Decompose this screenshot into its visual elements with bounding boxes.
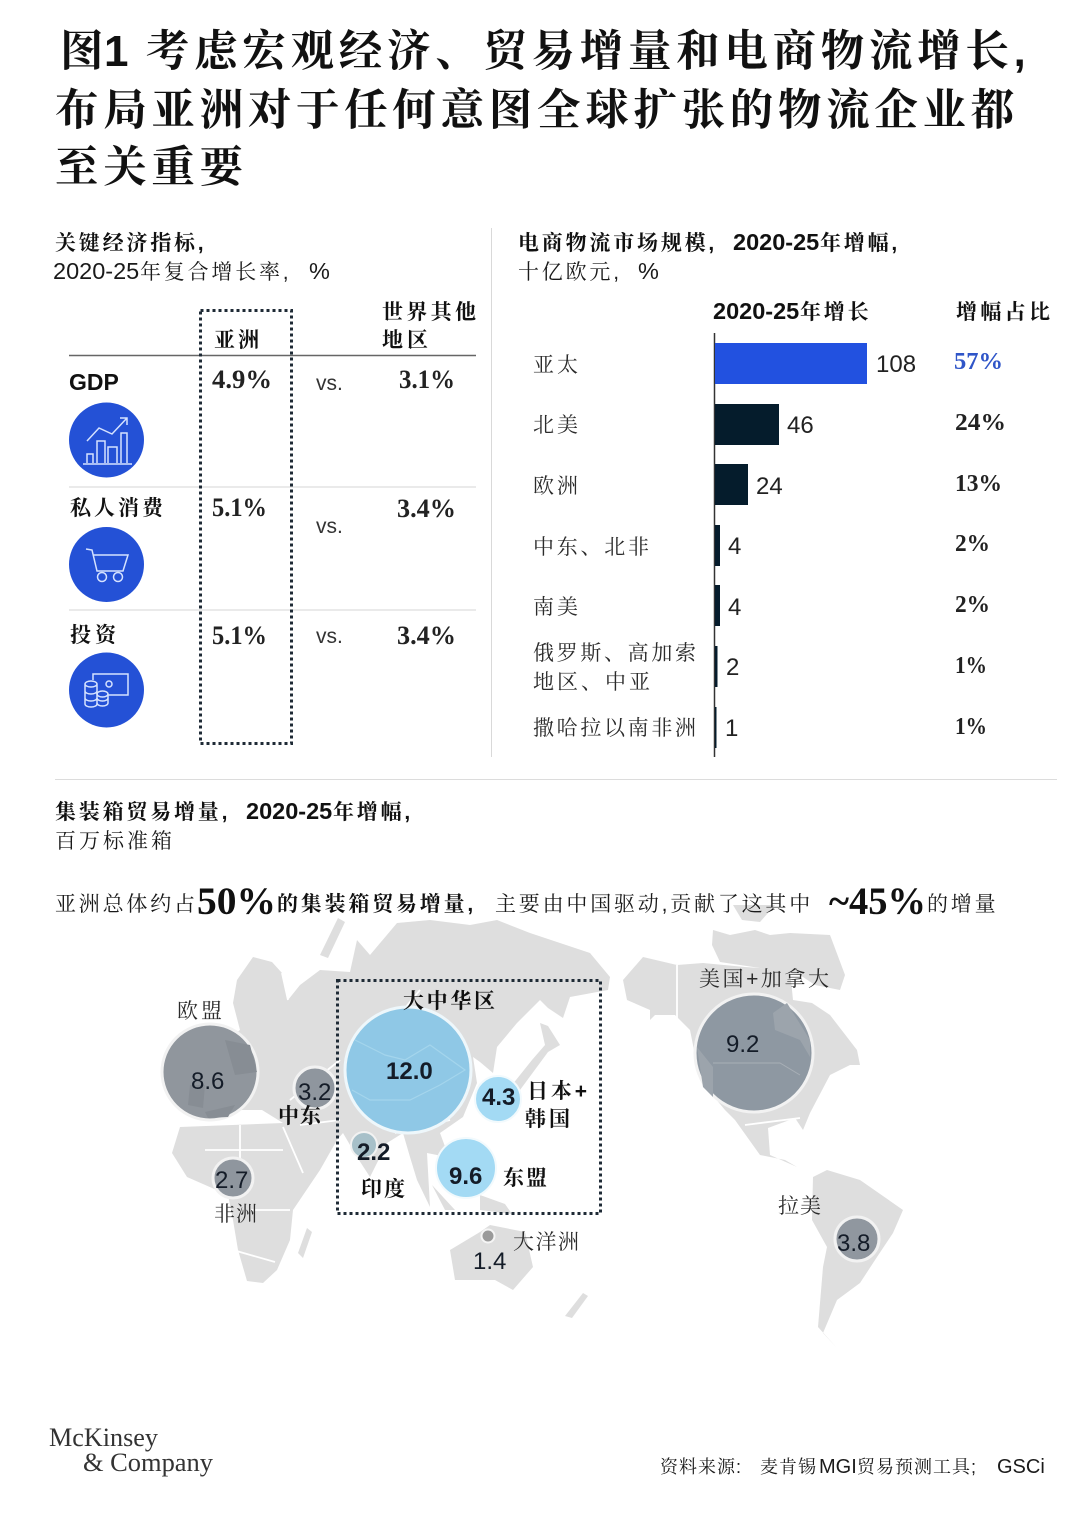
column header: rest of world: 地区 bbox=[382, 329, 428, 352]
row: private consumption: 私人消费 bbox=[70, 497, 165, 520]
row: private consumption: 3.4% bbox=[397, 494, 456, 523]
callout sentence: 的集装箱贸易增量, bbox=[277, 893, 476, 916]
heading: market size: 2020-25 bbox=[733, 229, 819, 255]
row: private consumption: vs. bbox=[316, 515, 343, 538]
row: GDP: 4.9% bbox=[212, 365, 272, 394]
bubble: Japan and Korea: 4.3 bbox=[482, 1084, 515, 1111]
bar: Middle East and North Africa: 2% bbox=[955, 531, 990, 557]
heading: market size: 电商物流市场规模, bbox=[518, 232, 717, 255]
bar: Sub-Saharan Africa: 1% bbox=[955, 714, 987, 740]
bar: South America: 4 bbox=[728, 594, 741, 621]
bubble: Oceania bbox=[473, 1230, 579, 1275]
title: 至关重要 bbox=[55, 144, 248, 192]
bar: Russia, Caucasus, Central Asia: 2 bbox=[726, 654, 739, 681]
row: investment: 投资 bbox=[70, 624, 119, 647]
title bbox=[55, 27, 1030, 192]
row: investment: 5.1% bbox=[212, 621, 267, 650]
bar: Asia Pacific: 108 bbox=[876, 351, 916, 378]
callout sentence: 亚洲总体约占 bbox=[55, 893, 198, 916]
bubble: ASEAN: 东盟 bbox=[503, 1167, 547, 1190]
bubble: EU: 8.6 bbox=[191, 1068, 224, 1095]
heading: container trade: 年增幅, bbox=[333, 800, 413, 824]
title: 布局亚洲对于任何意图全球扩张的物流企业都 bbox=[55, 86, 1019, 135]
bar: Sub-Saharan Africa: 撒哈拉以南非洲 bbox=[533, 717, 696, 740]
row: investment: vs. bbox=[316, 625, 343, 648]
bubble: Africa bbox=[213, 1158, 257, 1226]
map: Greenland tip bbox=[733, 905, 775, 922]
bar: Russia, Caucasus, Central Asia: 俄罗斯、高加索 bbox=[533, 642, 696, 665]
row: private consumption bbox=[69, 493, 456, 602]
heading: market size: 年增幅, bbox=[820, 231, 900, 255]
callout sentence: 的增量 bbox=[927, 893, 998, 916]
map: Arctic Canada bbox=[712, 930, 845, 990]
logo: McKinsey & Company bbox=[49, 1423, 213, 1477]
bubble: Middle East: 中东 bbox=[278, 1105, 323, 1128]
bar: Asia Pacific: 57% bbox=[954, 349, 1003, 375]
dotted highlight: Asia column bbox=[200, 310, 292, 744]
bubble: Oceania: 大洋洲 bbox=[513, 1231, 579, 1254]
column header: growth: 年增长 bbox=[800, 300, 871, 324]
icon: money and coins bbox=[69, 652, 144, 728]
bar: Russia, Caucasus, Central Asia bbox=[533, 642, 987, 694]
map: Eurasia and Africa bbox=[172, 920, 610, 1283]
bubble: USA and Canada: 美国+加拿大 bbox=[699, 968, 829, 991]
map borders bbox=[205, 965, 800, 1262]
panel: key economic indicators bbox=[53, 232, 476, 744]
row: GDP: GDP bbox=[69, 369, 119, 395]
bubble: Oceania: 1.4 bbox=[473, 1248, 506, 1275]
column header: share: 增幅占比 bbox=[956, 301, 1050, 324]
row: GDP: 3.1% bbox=[399, 365, 455, 394]
heading: indicators: 关键经济指标, bbox=[55, 232, 206, 255]
icon: growth chart bbox=[69, 402, 144, 478]
bubble: USA and Canada: 9.2 bbox=[726, 1031, 759, 1058]
bubble: Greater China: 大中华区 bbox=[403, 990, 495, 1013]
bar: Middle East and North Africa: 中东、北非 bbox=[533, 536, 649, 559]
heading: indicators: 年复合增长率, bbox=[140, 261, 291, 284]
bubble: Africa: 2.7 bbox=[215, 1167, 248, 1194]
bubble: Middle East bbox=[278, 1067, 336, 1128]
bubble: ASEAN: 9.6 bbox=[449, 1163, 482, 1190]
row: GDP bbox=[69, 365, 455, 478]
bar: South America bbox=[533, 585, 990, 626]
heading: market size: % bbox=[638, 258, 659, 284]
bar: Asia Pacific: 亚太 bbox=[533, 354, 578, 377]
map: North America bbox=[623, 957, 860, 1167]
callout sentence bbox=[55, 880, 998, 923]
bubble: Latin America bbox=[778, 1195, 879, 1261]
bubble: EU: 欧盟 bbox=[177, 1000, 222, 1023]
heading: indicators bbox=[53, 232, 330, 284]
bar: Russia, Caucasus, Central Asia: 1% bbox=[955, 653, 987, 679]
bubble: EU bbox=[162, 1000, 258, 1120]
heading: container trade: 百万标准箱 bbox=[55, 830, 172, 853]
bar: Europe: 24 bbox=[756, 473, 783, 500]
map: Indonesia bbox=[432, 1185, 512, 1214]
map: Japan bbox=[512, 1023, 560, 1090]
title: 1 bbox=[104, 27, 128, 76]
heading: market size bbox=[518, 229, 900, 284]
heading: container trade: 2020-25 bbox=[246, 798, 332, 824]
bar: Russia, Caucasus, Central Asia: 地区、中亚 bbox=[533, 671, 650, 694]
bar chart bbox=[533, 333, 1006, 757]
source note: GSCi bbox=[997, 1456, 1045, 1478]
map: South America bbox=[812, 1170, 903, 1348]
heading: indicators: 2020-25 bbox=[53, 258, 139, 284]
row: private consumption: 5.1% bbox=[212, 493, 267, 522]
column header: Asia: 亚洲 bbox=[214, 329, 259, 352]
title: 考虑宏观经济、贸易增量和电商物流增长, bbox=[146, 28, 1030, 76]
row: GDP: vs. bbox=[316, 372, 343, 395]
bubble: India: 2.2 bbox=[357, 1139, 390, 1166]
bubble: Greater China bbox=[345, 990, 495, 1133]
callout sentence: ~45% bbox=[829, 880, 926, 923]
bubble: Africa: 非洲 bbox=[214, 1203, 257, 1226]
row: investment bbox=[69, 621, 456, 728]
bar: North America bbox=[533, 404, 1006, 445]
column header: growth: 2020-25 bbox=[713, 298, 799, 324]
bubble: USA and Canada bbox=[695, 968, 829, 1112]
section divider bbox=[55, 778, 1057, 780]
column header: rest of world bbox=[382, 300, 476, 352]
bubble: India: 印度 bbox=[361, 1177, 405, 1201]
bar: Sub-Saharan Africa bbox=[533, 707, 987, 748]
bubble: Middle East: 3.2 bbox=[298, 1079, 331, 1106]
bar: South America: 2% bbox=[955, 592, 990, 618]
bar: Middle East and North Africa bbox=[533, 525, 990, 566]
world map bbox=[172, 905, 903, 1348]
logo: McKinsey & Company: & Company bbox=[83, 1448, 213, 1477]
bar: North America: 24% bbox=[955, 410, 1006, 436]
icon: shopping cart bbox=[69, 527, 144, 602]
bar: South America: 南美 bbox=[533, 596, 578, 619]
bubble: ASEAN bbox=[436, 1138, 547, 1198]
bubble: Greater China: 12.0 bbox=[386, 1058, 433, 1085]
column header: rest of world: 世界其他 bbox=[382, 300, 476, 324]
source note: 麦肯锡 bbox=[760, 1457, 817, 1477]
callout sentence: 50% bbox=[197, 880, 276, 923]
source note: 贸易预测工具; bbox=[857, 1457, 977, 1477]
panel: container trade bbox=[55, 798, 998, 1348]
bubble: Japan and Korea: 日本+ bbox=[527, 1080, 587, 1103]
source note: MGI bbox=[819, 1456, 857, 1478]
bubble: India bbox=[351, 1132, 405, 1201]
map: Novaya Zemlya bbox=[320, 918, 345, 958]
heading: indicators: % bbox=[309, 258, 330, 284]
heading: container trade: 集装箱贸易增量, bbox=[55, 801, 230, 824]
bubble: Japan and Korea: 韩国 bbox=[525, 1108, 570, 1131]
heading: market size: 十亿欧元, bbox=[518, 261, 622, 284]
bar: Middle East and North Africa: 4 bbox=[728, 533, 741, 560]
bar: Europe bbox=[533, 464, 1002, 505]
bubble: Japan and Korea bbox=[475, 1076, 587, 1131]
bubble: Latin America: 3.8 bbox=[837, 1230, 870, 1257]
bar: North America: 46 bbox=[787, 412, 814, 439]
panel: e-commerce logistics market bbox=[518, 229, 1050, 757]
bar: Europe: 13% bbox=[955, 471, 1002, 497]
title: 图 bbox=[60, 28, 108, 76]
table rules bbox=[69, 356, 476, 610]
map: New Zealand bbox=[565, 1293, 588, 1318]
panel divider bbox=[490, 228, 492, 757]
bubble: Latin America: 拉美 bbox=[778, 1195, 821, 1218]
dotted highlight: Asia region bbox=[338, 980, 600, 1214]
bar: Asia Pacific bbox=[533, 343, 1003, 384]
map: Madagascar bbox=[298, 1228, 312, 1258]
bar: North America: 北美 bbox=[533, 414, 578, 437]
heading: container trade bbox=[55, 798, 413, 853]
logo: McKinsey & Company: McKinsey bbox=[49, 1423, 158, 1452]
map: Australia bbox=[450, 1225, 533, 1290]
source note: 资料来源: bbox=[660, 1457, 742, 1477]
callout sentence: 主要由中国驱动,贡献了这其中 bbox=[495, 893, 813, 916]
row: investment: 3.4% bbox=[397, 621, 456, 650]
bar: Sub-Saharan Africa: 1 bbox=[725, 715, 738, 742]
bar: Europe: 欧洲 bbox=[533, 475, 578, 498]
